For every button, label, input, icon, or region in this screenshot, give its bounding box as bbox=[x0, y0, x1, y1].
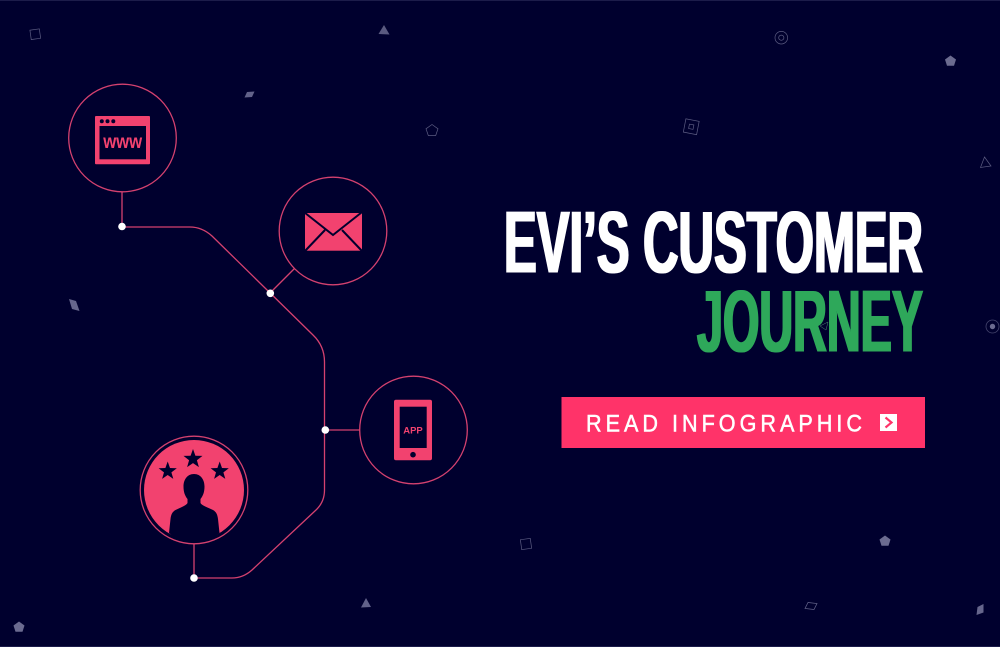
button: read infographic: READ INFOGRAPHIC bbox=[586, 410, 862, 437]
path nodes bbox=[118, 223, 329, 582]
app node bbox=[360, 376, 467, 484]
website node bbox=[69, 84, 176, 192]
icon: three stars bbox=[159, 449, 229, 479]
icon: person silhouette bbox=[169, 474, 220, 541]
icon: chevron box bbox=[880, 414, 897, 431]
icon: envelope bbox=[304, 212, 362, 251]
button: read infographic bbox=[562, 397, 925, 448]
title bbox=[504, 192, 923, 370]
review node bbox=[140, 436, 248, 544]
email node bbox=[279, 177, 387, 285]
icon: browser window: www bbox=[102, 132, 142, 153]
journey connector path bbox=[122, 192, 360, 578]
icon: smartphone: APP bbox=[403, 425, 423, 436]
faint triangle over title bbox=[820, 322, 828, 330]
